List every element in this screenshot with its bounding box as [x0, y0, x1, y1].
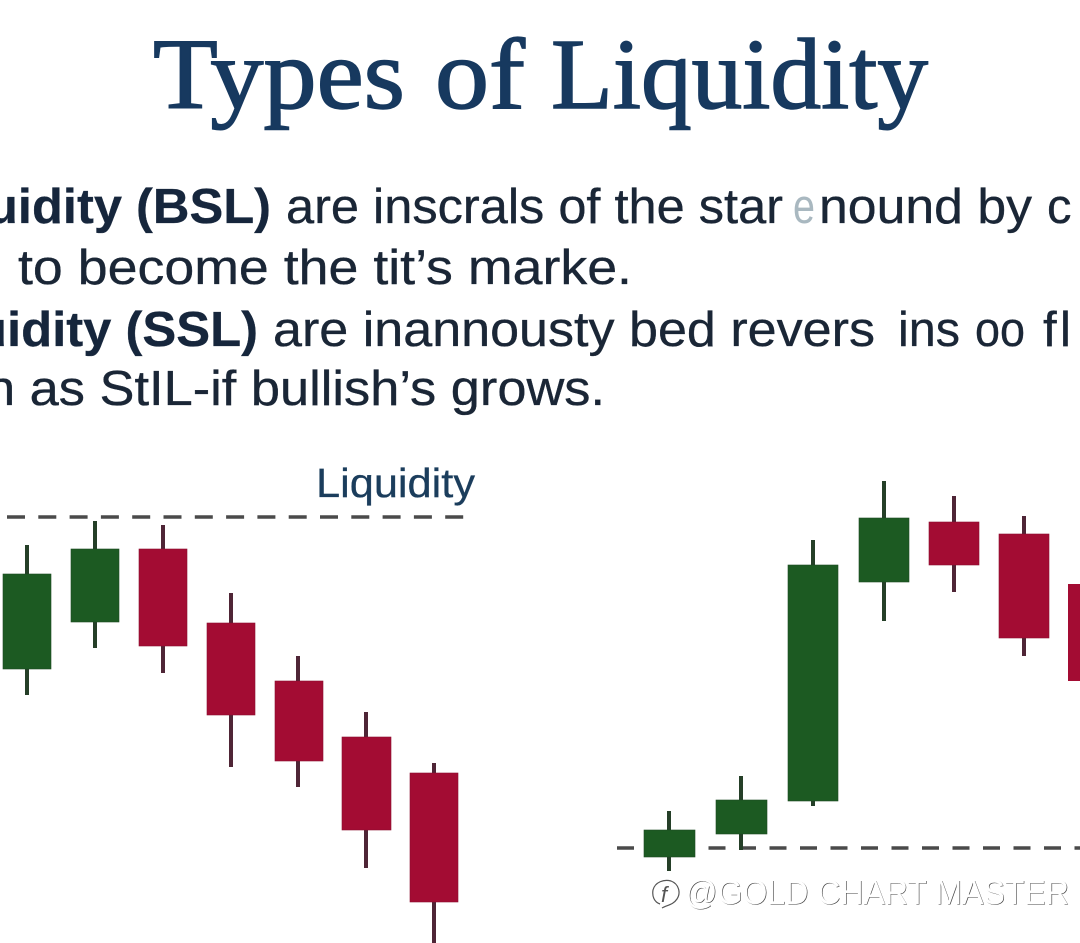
chart: left candlesticks: [3, 517, 467, 943]
candle 2: [716, 776, 767, 850]
candle 1: [644, 811, 695, 871]
title: [153, 18, 928, 130]
candle 5: [275, 656, 323, 787]
SSL line 2: n as StIL-if bullish’s grows.: [0, 362, 605, 416]
liquidity dashed line: bottom: [617, 846, 1080, 850]
candle 3: [788, 540, 838, 806]
SSL line 1: f: [1043, 303, 1057, 357]
candle 6: [999, 516, 1049, 656]
candle 3: [139, 525, 187, 673]
BSL line 1: are inscrals of the star: [286, 180, 783, 234]
BSL line 1: c: [1047, 180, 1072, 234]
liquidity dashed line: top: [7, 515, 467, 519]
SSL line 1: oo: [975, 303, 1025, 357]
SSL line 1: l: [1060, 303, 1071, 357]
icon: speech bubble f: [653, 880, 679, 908]
candle 6: [342, 712, 391, 868]
BSL line 1: [0, 180, 1072, 234]
icon: speech bubble f: f: [661, 882, 670, 907]
title: of: [435, 18, 525, 130]
watermark: [653, 874, 1070, 912]
text block: liquidity definitions: [0, 180, 1072, 416]
candle 4: [859, 481, 909, 621]
BSL line 1: e: [793, 180, 815, 234]
chart: right candlesticks: [617, 481, 1080, 871]
BSL line 1: nound by: [819, 180, 1033, 234]
candle 2: [71, 521, 119, 648]
title: Types: [153, 18, 405, 130]
BSL line 2: to become the tit’s marke.: [18, 241, 632, 295]
SSL line 1: are inannousty bed revers: [273, 303, 875, 357]
label: Liquidity: Liquidity: [316, 460, 476, 506]
candle 1: [3, 545, 51, 695]
candle 7: [410, 763, 458, 943]
title: Liquidity: [551, 18, 928, 130]
candle 5: [929, 496, 979, 592]
candle 4: [207, 593, 255, 767]
SSL line 1: [0, 303, 1071, 357]
candle 7: [1068, 584, 1080, 681]
SSL line 1: ins: [898, 303, 960, 357]
